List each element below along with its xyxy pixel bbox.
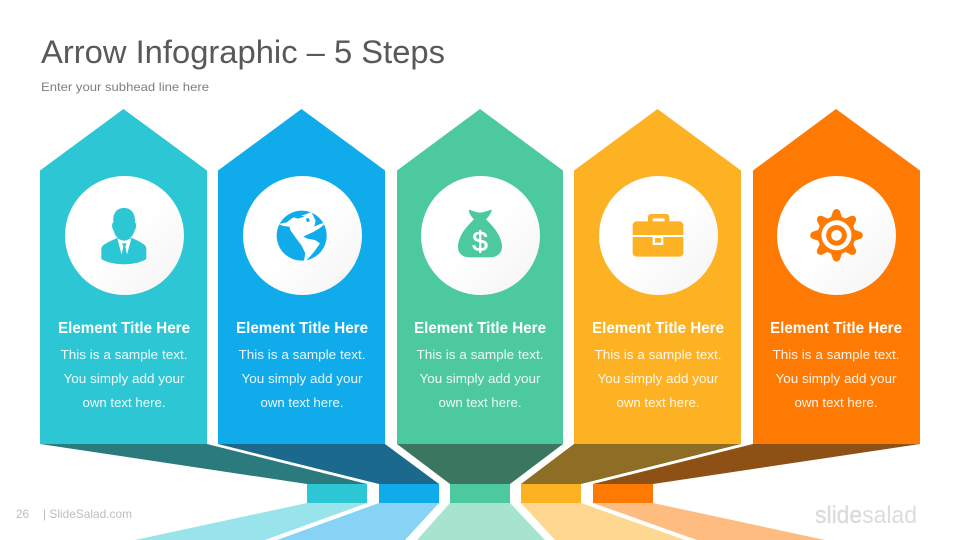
icon: money bag: $ <box>472 226 488 257</box>
icon circle <box>243 176 362 295</box>
step 5 title: Element Title Here <box>770 320 902 337</box>
title: Arrow Infographic – 5 Steps <box>41 34 445 70</box>
step 5 body text: own text here. <box>794 395 878 410</box>
converging funnel: colour blocks <box>307 484 653 503</box>
arrow shape <box>397 109 563 444</box>
icon circle <box>777 176 896 295</box>
step 5 body text: You simply add your <box>776 371 897 386</box>
step 1 body text: This is a sample text. <box>60 347 188 362</box>
converging funnel: dark shadows <box>40 444 920 484</box>
step 1 body text <box>60 347 188 410</box>
icon: globe <box>277 211 327 261</box>
icon: briefcase <box>633 214 683 257</box>
footer site name: | SlideSalad.com <box>43 507 132 521</box>
step 2 body text: This is a sample text. <box>238 347 366 362</box>
icon: money bag <box>458 210 502 257</box>
icon circle <box>599 176 718 295</box>
step 1 title: Element Title Here <box>58 320 190 337</box>
step 3 body text: own text here. <box>438 395 522 410</box>
step 3 body text: You simply add your <box>420 371 541 386</box>
step 2 body text: You simply add your <box>242 371 363 386</box>
step 1 body text: own text here. <box>82 395 166 410</box>
subhead: Enter your subhead line here <box>41 80 209 94</box>
step 2 title: Element Title Here <box>236 320 368 337</box>
icon: businessman <box>101 208 146 264</box>
arrow shape <box>40 109 207 444</box>
icon circle <box>65 176 184 295</box>
step 4 body text: own text here. <box>616 395 700 410</box>
arrow shape <box>218 109 385 444</box>
step 5 body text: This is a sample text. <box>772 347 900 362</box>
step 3 body text: This is a sample text. <box>416 347 544 362</box>
logo: slidesalad <box>815 502 917 529</box>
panel: step 2 <box>218 109 385 444</box>
step 4 body text: This is a sample text. <box>594 347 722 362</box>
step 3 body text <box>416 347 544 410</box>
step 4 body text: You simply add your <box>598 371 719 386</box>
diverging funnel: light beams <box>135 503 825 540</box>
icon circle <box>421 176 540 295</box>
icon: gear <box>810 209 863 262</box>
panel: step 1 <box>40 109 207 444</box>
page number: 26 <box>16 507 29 521</box>
step 3 title: Element Title Here <box>414 320 546 337</box>
step 1 body text: You simply add your <box>64 371 185 386</box>
arrow shape <box>753 109 920 444</box>
panel: step 5 <box>753 109 920 444</box>
step 5 body text <box>772 347 900 410</box>
step 4 body text <box>594 347 722 410</box>
arrow shape <box>574 109 741 444</box>
step 2 body text: own text here. <box>260 395 344 410</box>
panel: step 3 <box>397 109 563 444</box>
step 4 title: Element Title Here <box>592 320 724 337</box>
panel: step 4 <box>574 109 741 444</box>
step 2 body text <box>238 347 366 410</box>
